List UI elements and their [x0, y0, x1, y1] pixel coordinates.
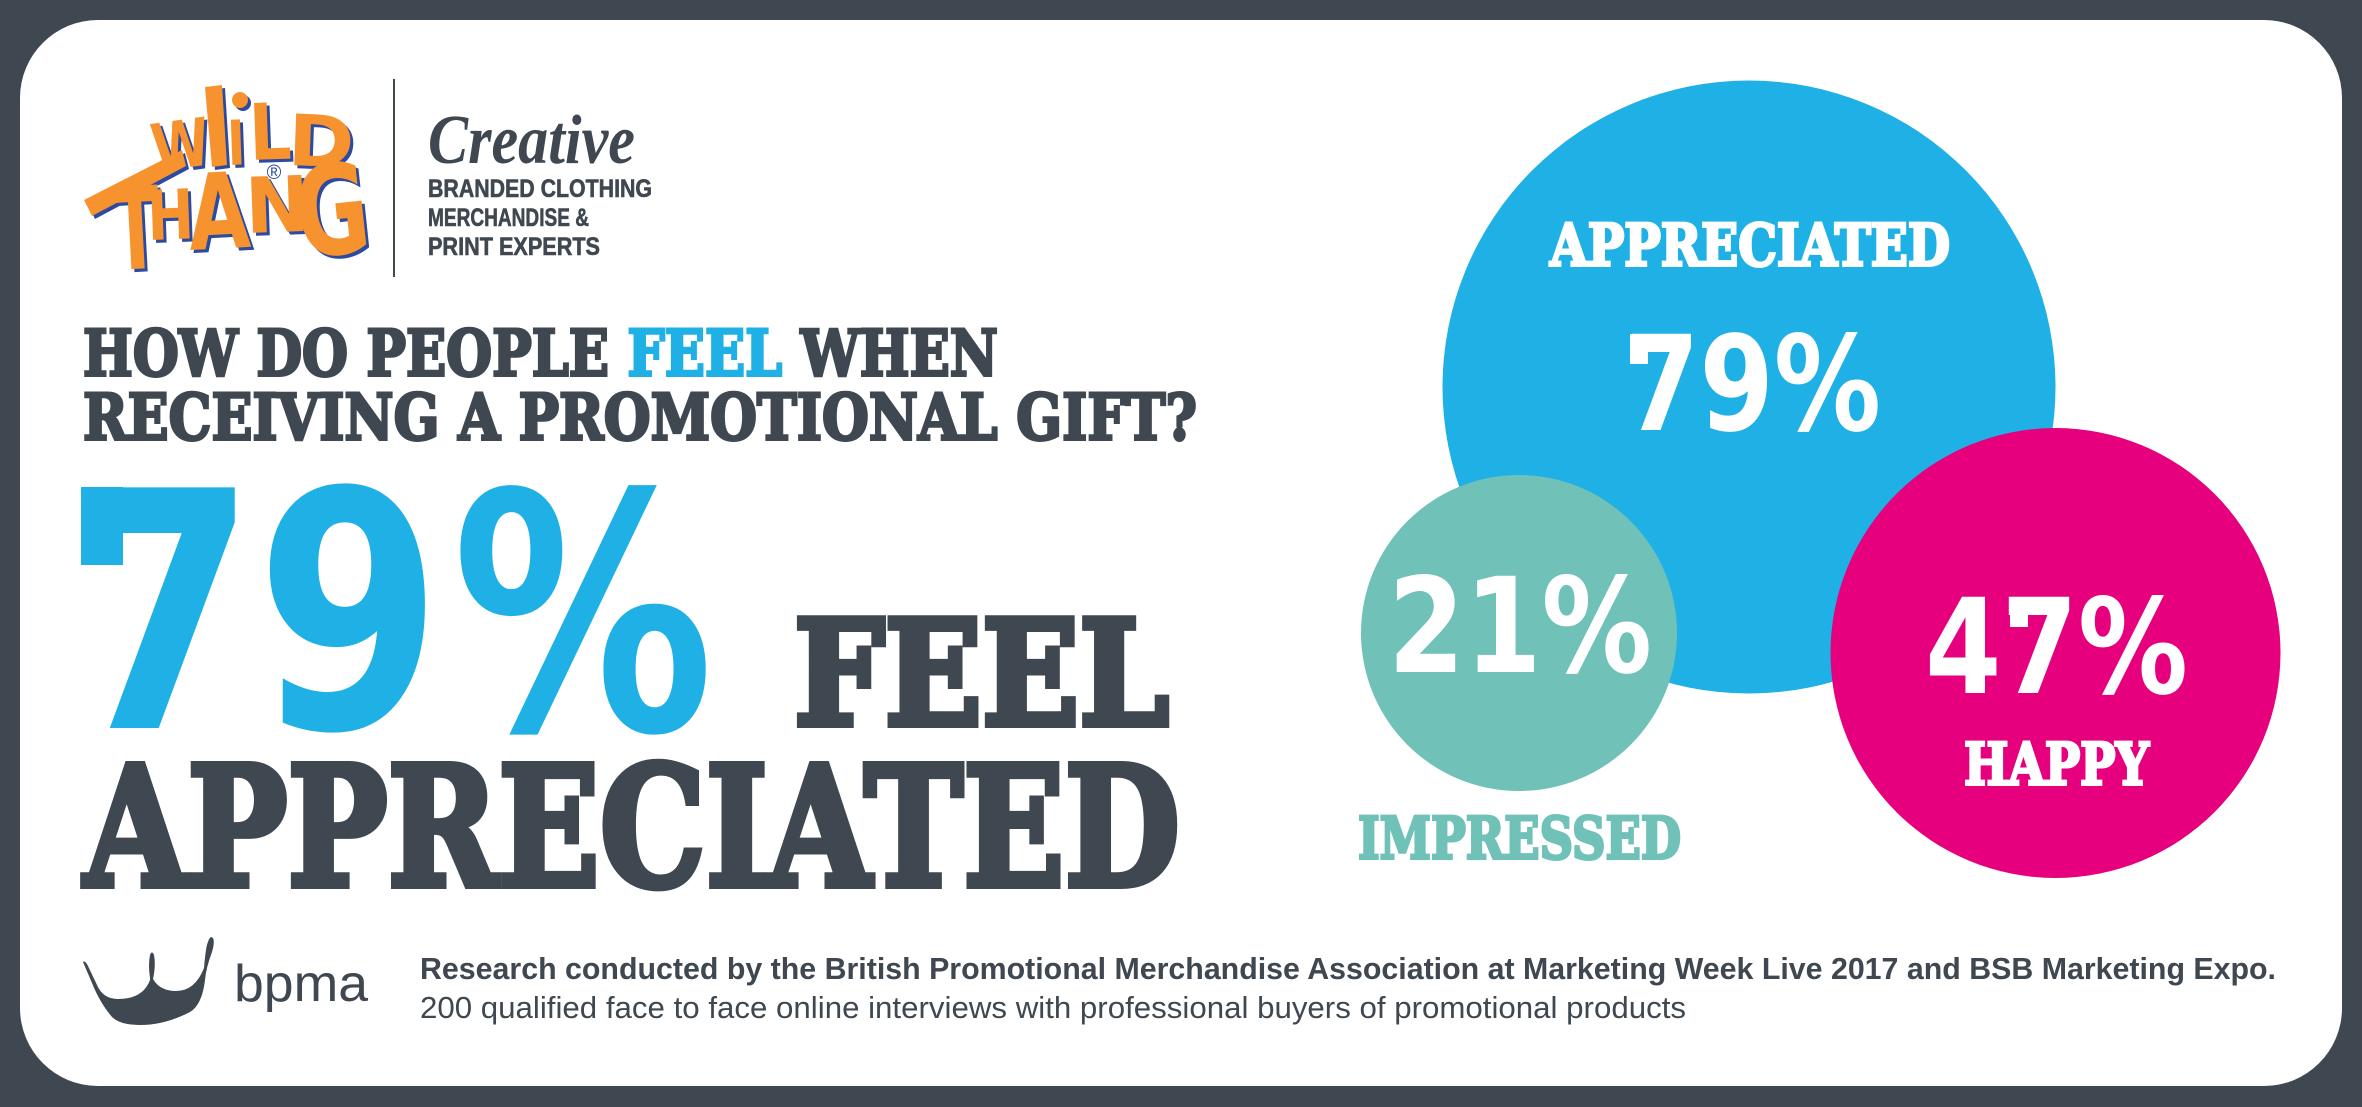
logo word: THANG: T [109, 163, 164, 298]
logo tall stroke of W [205, 85, 227, 167]
source note [420, 951, 2276, 1025]
logo divider [393, 79, 395, 277]
source note: Research conducted by the British Promotional Merchandise Association at Marketing Week Live 2017 and BSB Marketing Expo. [420, 951, 2276, 986]
logo dot of i [232, 92, 248, 108]
tick on the 7 [1630, 334, 1648, 364]
big statement: FEEL APPRECIATED: APPRECIATED [82, 730, 1180, 926]
source note: 200 qualified face to face online interviews with professional buyers of promotional products [420, 990, 1686, 1025]
bubble: impressed [1361, 475, 1677, 791]
heading question: RECEIVING A PROMOTIONAL GIFT? [83, 380, 1197, 456]
bpma logo [83, 937, 368, 1025]
big statistic: 79%: % [452, 424, 714, 808]
bubble: impressed: 21% [1388, 550, 1652, 704]
logo word: WILD: L [248, 87, 293, 179]
logo crossbar of T [84, 150, 186, 216]
big statement: FEEL APPRECIATED [82, 590, 1180, 926]
bubble: appreciated: 79% [1625, 308, 1881, 462]
heading question [83, 316, 1197, 456]
label: impressed: IMPRESSED [1358, 804, 1681, 872]
heading question: HOW DO PEOPLE FEEL WHEN [83, 316, 998, 392]
bubble: happy [1830, 428, 2280, 878]
bubble: appreciated: APPRECIATED [1549, 212, 1950, 280]
bubble: happy: HAPPY [1964, 730, 2149, 798]
logo word: THANG: A [185, 149, 253, 275]
logo word: WILD: D [286, 99, 356, 184]
logo word: WILD: W [147, 105, 215, 188]
brand script: Creative: Creative [428, 102, 635, 179]
bpma wordmark: bpma [234, 955, 368, 1013]
brand tagline: PRINT EXPERTS [428, 233, 600, 261]
logo word: THANG: G [288, 135, 377, 288]
big statement: FEEL APPRECIATED: FEEL [794, 590, 1169, 760]
brand tagline: MERCHANDISE & [428, 204, 589, 232]
logo word: THANG: N [244, 161, 311, 252]
tick on the 7 [81, 487, 123, 565]
bubble: appreciated [1442, 80, 2056, 694]
big statistic: 79%: 79 [70, 422, 442, 806]
brand tagline [428, 175, 652, 261]
logo: Wild Thang [84, 85, 377, 298]
icon: bpma crown [83, 937, 214, 1025]
bubble: happy: 47% [1925, 571, 2188, 725]
brand tagline: BRANDED CLOTHING [428, 175, 652, 203]
logo registered mark: ® [267, 162, 282, 184]
logo word: WILD [147, 87, 356, 188]
logo word: THANG [109, 135, 377, 298]
logo word: THANG: H [146, 175, 195, 256]
tick on the 7 [2010, 597, 2028, 627]
logo word: WILD: I [226, 108, 247, 181]
